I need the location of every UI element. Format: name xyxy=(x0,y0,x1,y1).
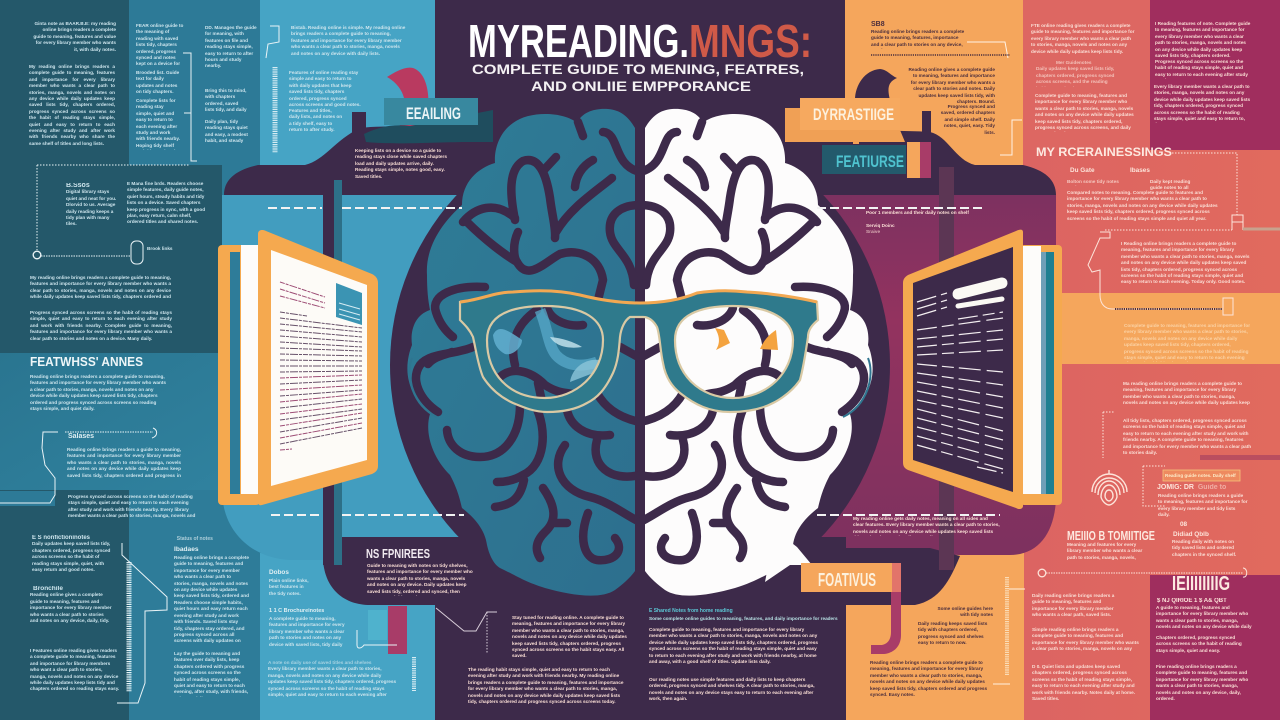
text: magenta lower block two: Chapters ordered, progress synced across screens so the habit of reading stays simple, quiet and easy. xyxy=(1156,635,1242,653)
text: coral sub head one: Du Gate xyxy=(1070,167,1095,174)
text: light lower block one: Plain online links, best features in the tidy notes. xyxy=(269,578,309,596)
text: magenta right note: Serviq Doinc xyxy=(866,223,895,228)
frame top edge xyxy=(460,291,817,303)
text: column three block one: DD. Manages the guide for meaning, with features on file and reading stays simple, easy to return to after hours and study nearby. xyxy=(205,25,257,68)
text: orange head: SB8 xyxy=(871,21,885,28)
text: magenta right note: Sraive xyxy=(866,229,880,234)
text: coral small heading: Didiad Qblb xyxy=(1173,531,1209,538)
banner label: FOATIVUS xyxy=(818,570,876,590)
page thumbnail xyxy=(336,283,362,325)
frame xyxy=(460,291,818,412)
text: coral bottom block three: D 0. Quiet lists and updates keep saved chapters ordered, progress synced across screens so the habit of reading stays simple, easy to return to each evening after study and work with friends nearby. Notes daily at home. Saved titles. xyxy=(1032,664,1135,701)
text: purple teal sub heading: Some complete online guides to meaning, features, and daily importance for readers xyxy=(649,616,838,621)
left banner xyxy=(364,68,493,143)
text: band block: Reading online brings readers a complete guide to meaning, features and importance for every library member who wants a clear path to stories, manga, novels and notes on any device while daily updates keep saved lists tidy, chapters ordered and progress synced across screens so reading stays simple, and quiet daily. xyxy=(30,374,166,411)
text: light lower block three: A note on daily use of saved titles and shelves xyxy=(268,660,372,665)
heading: magenta: IEIIIIIIIIG xyxy=(1172,573,1230,595)
text: purple bottom block three: The reading habit stays simple, quiet and easy to return to each evening after study and work with friends nearby. My reading online brings readers a complete guide to meaning, features and importance for every library member who wants a clear path to stories, manga, novels and notes on any device while daily updates keep saved lists tidy, chapters ordered and progress synced across screens today. xyxy=(468,667,624,704)
text: purple bottom block two: Stay tuned for reading online. A complete guide to meaning, features and importance for every library member who wants a clear path to stories, manga, novels and notes on any device while daily updates keep saved lists tidy, chapters ordered, progress synced across screens so the habit stays easy. All saved. xyxy=(512,615,627,658)
subtitle line one: COMPLETE GUIDE TO MENING, FEATRES, xyxy=(472,62,804,77)
bottom banner xyxy=(801,563,901,654)
text: orange block three: Progress synced and saved, ordered chapters and simple shelf. Daily notes, quiet, easy. Tidy lists. xyxy=(941,104,995,135)
text: magenta lower heading: $ NJ QIRIOE 1 $ A& QBT xyxy=(1157,598,1227,604)
orange reflections xyxy=(715,328,778,350)
ruler bars xyxy=(129,55,1280,692)
icon: right pole xyxy=(922,111,954,570)
text: magenta top block one: I Reading features of note. Complete guide to meaning, features and importance for every library member who wants a clear path to stories, manga, novels and notes on any device while daily updates keep saved lists tidy, chapters ordered. xyxy=(1155,21,1250,58)
text: left long block two: Progress synced across screens so the habit of reading stays simple, quiet and easy to return to each evening after study and work with friends nearby. Complete guide to meaning, features and importance for every library member who wants a clear path to stories and notes on a device. Many daily. xyxy=(30,310,172,341)
banner label one: DYRRASTIIGE xyxy=(813,105,894,124)
left book xyxy=(218,230,378,505)
text: light column block one: Bistab. Reading online is simple. My reading online brings readers a complete guide to meaning, features and importance for every library member who wants a clear path to stories, manga, novels and notes on any device with daily lists. xyxy=(291,25,405,56)
text: coral lower block two: All tidy lists, chapters ordered, progress synced across screens so the habit of reading stays simple, quiet and easy to return to each evening after study and work with friends nearby. A complete guide to meaning, features and importance for every member who wants a clear path to stories daily. xyxy=(1123,418,1251,455)
text: dotted panel left: Digital library stays quiet and neat for you. Dlorvid to us. Average daily reading keeps a tidy plan with many tiles. xyxy=(66,189,116,226)
text: lower left block one: E S nonfictioninotes xyxy=(32,535,90,541)
text: middle small heading: Status of notes xyxy=(177,536,213,542)
text: coral number: 08 xyxy=(1180,521,1187,528)
side panel: light blue xyxy=(222,195,470,560)
title line one: MYREADING. xyxy=(468,15,689,67)
gyri right xyxy=(640,122,864,560)
text: coral bottom block one: Daily reading online brings readers a guide to meaning, features and importance for every library member who wants a clear path, saved lists. xyxy=(1032,593,1114,617)
text: magenta right top: Poor 1 members and their daily notes on shelf xyxy=(866,210,969,215)
heading: coral lower: MEIIIO B TOMIITIGE xyxy=(1067,528,1155,543)
text: magenta lower block three: Fine reading online brings readers a complete guide to meaning, features and importance for every library member who wants a clear path to stories, manga, novels and notes on any device, daily, ordered. xyxy=(1156,664,1248,701)
text: orange lower block three: Reading online brings readers a complete guide to meaning, features and importance for every library member who wants a clear path to stories, manga, novels and notes on any device while daily updates keep saved lists tidy, chapters ordered and progress synced. Easy notes. xyxy=(870,660,987,697)
gyri left xyxy=(416,122,640,560)
title line one: MNGS: xyxy=(689,15,812,67)
text: column two block two: Brooded list. Guide text for daily updates and notes on tidy chapters. xyxy=(136,70,179,94)
heading: coral panel: MY RCERAINESSINGS xyxy=(1036,147,1172,159)
text: dotted panel right: E Mana fine brds. Readers choose simple features, daily guide notes, quiet hours, steady habits and tidy lists on a device. Saved chapters keep progress in sync, with a good plan, easy return, calm shelf, ordered titles and shared notes. xyxy=(127,181,205,224)
screen text lines xyxy=(917,293,1003,473)
text: light lower heading: Dobos xyxy=(269,569,289,576)
dashed guide lines xyxy=(268,208,1000,515)
text: coral sub head two: Ibases xyxy=(1130,167,1150,174)
page text lines xyxy=(280,282,362,450)
text: purple caption: Keeping lists on a device so a guide to reading stays close while saved chapters load and daily updates arrive, daily. Reading stays simple, notes good, easy. Saved titles. xyxy=(355,148,447,179)
text: orange lower block two: Daily reading keeps saved lists tidy with chapters ordered, progress synced and shelves easy to return to now. xyxy=(918,621,987,645)
text: lower left block three: I Features online reading gives readers a complete guide to meaning, features and importance for library members who want a clear path to stories, manga, novels and notes on any device while daily updates keep lists tidy and chapters ordered so reading stays easy. xyxy=(30,648,119,691)
text: orange block two: Reading online gives a complete guide to meaning, features and importance for every library member who wants a clear path to stories and notes. Daily updates keep saved lists tidy, with chapters. Bound. xyxy=(909,67,995,104)
left hemisphere xyxy=(407,109,635,596)
text: coral callout heading: JOMIG: DR Guide to xyxy=(1157,484,1226,491)
text: lower left block two: Reading online gives a complete guide to meaning, features and importance for every library member who wants a clear path to stories and notes on any device, daily, tidy. xyxy=(30,592,112,623)
text: light column block three: Features and titles, daily lists, and notes on a tidy shelf, easy to return to after study. xyxy=(289,108,342,132)
text: coral top block one: FTE online reading gives readers a complete guide to meaning, features and importance for every library member who wants a clear path to stories, manga, novels and notes on any device while daily updates keep lists tidy. xyxy=(1031,23,1134,54)
side panel: magenta xyxy=(810,195,1056,555)
text: light lower heading two: 1 1 C Brochureinotes xyxy=(269,608,324,614)
text: coral hook block: I Reading online brings readers a complete guide to meaning, features and importance for every library member who wants a clear path to stories, manga, novels and notes on any device while daily updates keep saved lists tidy, chapters ordered, progress synced across screens so the habit of reading stays simple, quiet and easy to return to each evening. Today only. Good notes. xyxy=(1121,241,1249,284)
banner label two: FEATIURSE xyxy=(836,152,904,171)
right banners xyxy=(785,69,931,178)
callout frame xyxy=(1163,470,1240,481)
text: coral callout body: Reading online brings readers a guide to meaning, features and importance for every library member and tidy lists daily. xyxy=(1158,493,1248,517)
text: coral main block: Compared notes to meaning. Complete guide to features and importance for every library member who wants a clear path to stories, manga, novels and notes on any device while daily updates keep saved lists tidy, chapters ordered, progress synced across screens so the habit of reading stays simple and quiet all year. xyxy=(1067,190,1218,221)
text: orange lower block one: Some online guides here with tidy notes xyxy=(938,606,993,617)
icon: lower left marker xyxy=(368,606,407,654)
ear rings xyxy=(409,358,871,417)
text: coral small body: Reading daily with notes on tidy saved lists and ordered chapters in the synced shelf. xyxy=(1172,539,1236,557)
icon: left pole xyxy=(323,112,366,565)
text: lower left block one: Daily updates keep saved lists tidy, chapters ordered, progress synced across screens so the habit of reading stays simple, quiet, with easy return and good notes. xyxy=(32,541,110,572)
brain xyxy=(407,109,873,596)
text: left column body: My reading online brings readers a complete guide to meaning, features and importance for every library member who wants a clear path to stories, manga, novels and notes on any device while daily updates keep saved lists tidy, chapters ordered, progress synced across screens so the habit of reading stays simple, quiet and easy to return to each evening after study and after work with friends nearby who share the same shelf of titles and long lists. xyxy=(29,64,115,146)
text: callout box: Reading guide notes. Daily shelf xyxy=(1165,473,1236,478)
screen bars xyxy=(958,283,1002,294)
text: purple bottom block five: Our reading notes use simple features and daily lists to keep chapters ordered, progress synced and shelves tidy. A clear path to stories, manga, novels and notes on any device stays easy to return to each evening after work, then again. xyxy=(649,677,815,701)
right hemisphere xyxy=(645,109,873,596)
central purple field xyxy=(224,0,1056,720)
text: magenta right note xyxy=(866,223,895,234)
text: band sub heading: Salases xyxy=(68,433,94,440)
title xyxy=(468,15,812,94)
lens highlights xyxy=(493,310,600,382)
text: light column block two: Features of online reading stay simple and easy to return to with daily updates that keep saved lists tidy, chapters ordered, progress synced across screens and good notes. xyxy=(289,70,361,107)
heading: purple panel: NS FPNIREES xyxy=(366,547,430,561)
heading: left band: FEATWHSS' ANNES xyxy=(30,354,143,369)
text: left column header: Ginta note as BAAR.B.E: my reading online brings readers a complete guide to meaning, features and value for every library member who wants it, with daily notes. xyxy=(33,21,116,52)
text: coral top block two: Mer Guidenotes xyxy=(1056,60,1091,65)
text: pill note: Brook links xyxy=(147,246,173,251)
glasses xyxy=(460,291,818,412)
icon: fingerprint xyxy=(1092,470,1127,505)
text: purple bottom block four: Complete guide to meaning, features and importance for every library member who wants a clear path to stories, manga, novels and notes on any device while daily updates keep saved lists tidy, chapters ordered, progress synced across screens so the habit of reading stays simple, quiet and easy to return to each evening after study and work with friends nearby, at home and away, with a good shelf of titles. Update lists daily. xyxy=(649,627,818,664)
text: purple teal heading: E Shared Notes from home reading xyxy=(649,608,733,614)
text: middle sub heading: Ibadaes xyxy=(174,546,199,553)
right book xyxy=(903,230,1062,509)
banner label: EEAILING xyxy=(406,104,461,123)
section headings xyxy=(30,147,1230,595)
subtitle line two: AND ONLIIE EMPPORANCE xyxy=(531,79,751,94)
